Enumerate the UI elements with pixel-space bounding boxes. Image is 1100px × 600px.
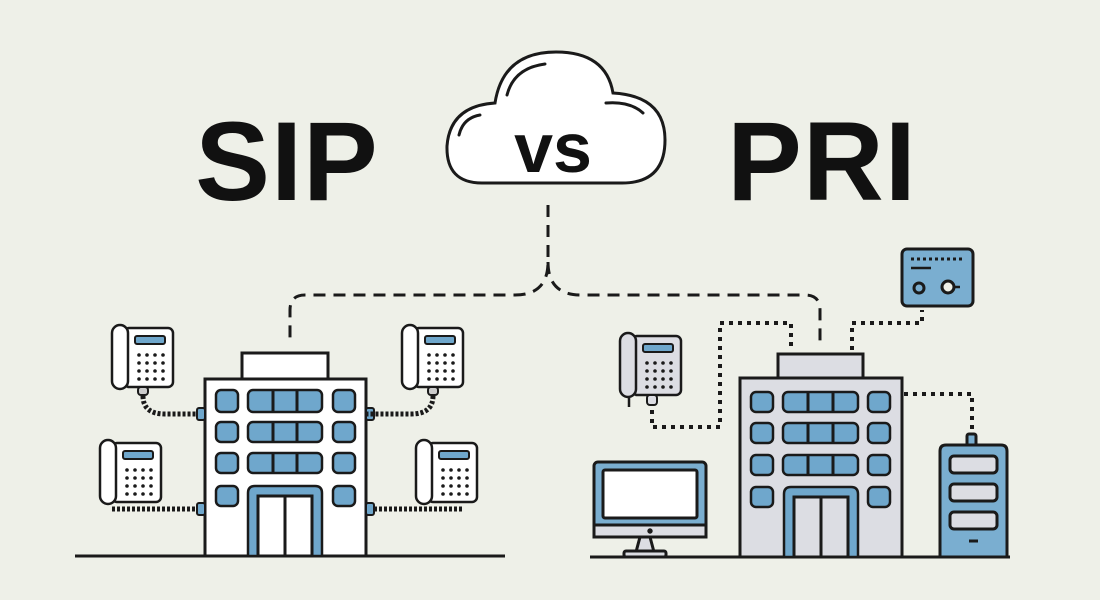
dotted connector lines (PRI) (652, 310, 972, 433)
phone: bottom right (416, 440, 477, 504)
PRI building (740, 354, 902, 557)
dashed connector lines (290, 205, 820, 345)
icon: monitor (594, 462, 706, 557)
title: SIP: SIP (195, 99, 379, 224)
icon: cloud with vs: vs (514, 109, 592, 187)
phone: top right (402, 325, 463, 395)
title: PRI: PRI (727, 99, 917, 224)
ground lines (75, 554, 505, 558)
phone: top left (112, 325, 173, 395)
coiled cords (112, 396, 462, 509)
phone: bottom left (100, 440, 161, 504)
SIP building (197, 353, 374, 556)
icon: cloud with vs (447, 52, 665, 187)
icon: server (940, 434, 1007, 557)
phone: PRI desk phone (620, 333, 681, 407)
icon: modem / PRI box (902, 249, 973, 306)
